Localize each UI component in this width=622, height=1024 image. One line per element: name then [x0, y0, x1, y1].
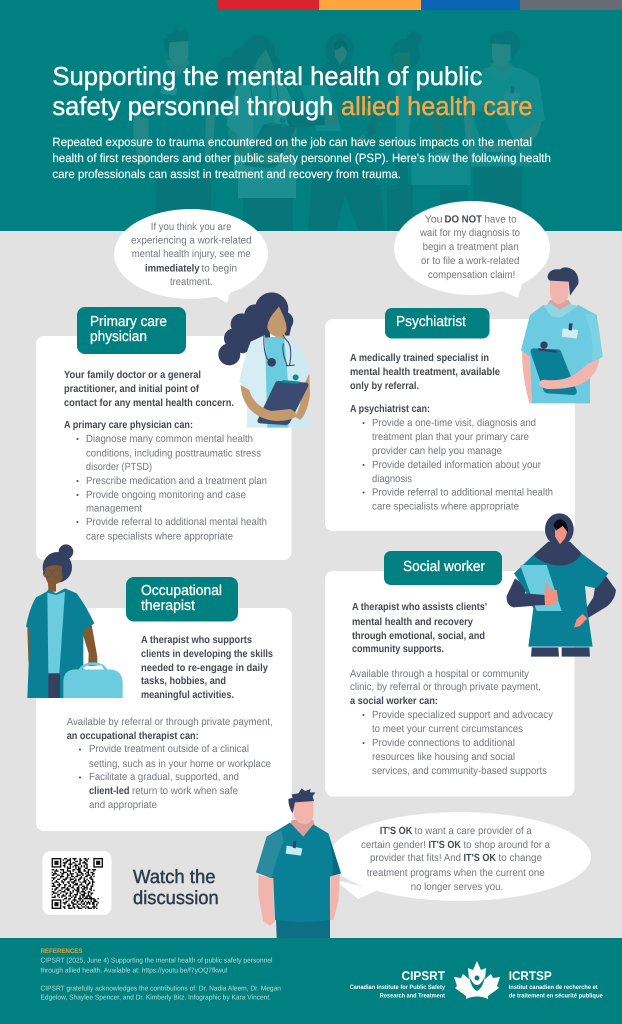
bullet list: Provide connections to additional [372, 738, 515, 749]
bullet list: Diagnose many common mental health [86, 434, 253, 445]
speech bubble: psychiatrist: You [425, 215, 443, 226]
description: tasks, hobbies, and [141, 676, 226, 687]
references: through allied health. Available at: https://youtu.be/f7yOQ7fkwuI [40, 966, 228, 974]
speech bubble: physician: experiencing a work-related [131, 236, 252, 247]
speech bubble: physician: mental health injury, see me [132, 249, 251, 260]
speech bubble: it's ok: certain gender! [361, 840, 426, 851]
icon: occupational therapist figure [26, 544, 123, 698]
references [40, 948, 281, 1002]
card [325, 571, 574, 796]
bullet list: care specialists where appropriate [372, 502, 519, 512]
availability text: Available through a hospital or community [350, 669, 530, 680]
references: CIPSRT (2025, June 4) Supporting the mental health of public safety personnel [40, 956, 273, 964]
heading: psychiatrist: Psychiatrist [396, 314, 466, 330]
panel: primary care physician [36, 307, 292, 560]
heading: social worker [384, 551, 502, 585]
speech bubble: physician [114, 209, 268, 303]
speech bubble: it's ok: no longer serves you. [411, 882, 503, 893]
speech bubble: it's ok: IT'S OK [428, 840, 461, 851]
description: mental health treatment, available [350, 367, 500, 378]
title: safety personnel through [52, 91, 333, 121]
bullet list: client-led [89, 786, 130, 797]
bullet list: return to work when safe [132, 786, 238, 797]
speech bubble: psychiatrist: compensation claim! [428, 270, 515, 281]
bullet list: Prescribe medication and a treatment plan [86, 476, 267, 487]
description: mental health and recovery [352, 617, 473, 628]
panel: psychiatrist [325, 308, 575, 531]
logo: CIPSRT ICRTSP: Research and Treatment [380, 992, 445, 1000]
watch the discussion: Watch the [133, 867, 216, 888]
QR code card [42, 851, 112, 915]
bullet list: disorder (PTSD) [86, 462, 152, 473]
header band [0, 0, 622, 231]
description: A therapist who assists clients' [352, 602, 487, 613]
speech bubble: psychiatrist: DO NOT [444, 215, 483, 226]
logo: CIPSRT ICRTSP: Institut canadien de recherche et [509, 984, 598, 991]
availability text [67, 717, 273, 742]
watch the discussion: discussion [133, 888, 219, 909]
logo: CIPSRT ICRTSP: Canadian Institute for Public Safety [350, 984, 445, 991]
description [64, 370, 234, 431]
references: REFERENCES [40, 948, 83, 955]
logo: CIPSRT ICRTSP: de traitement en sécurité publique [509, 992, 603, 1000]
speech bubble: physician: immediately [145, 264, 200, 275]
speech bubble: it's ok: to shop around for a [464, 840, 550, 851]
bullet list: and appropriate [89, 800, 157, 811]
bullet list: services, and community-based supports [372, 766, 547, 777]
speech bubble: physician: treatment. [170, 277, 212, 288]
bullet list [362, 710, 554, 777]
speech bubble: it's ok: to want a care provider of a [414, 826, 532, 837]
speech bubble: psychiatrist: have to [484, 215, 517, 226]
bullet list: diagnosis [372, 474, 412, 485]
description: meaningful activities. [141, 690, 234, 701]
heading: occupational therapist: Occupational [141, 583, 222, 599]
watch the discussion [133, 867, 219, 909]
panel: social worker [325, 551, 574, 796]
speech bubble: psychiatrist: begin a treatment plan [423, 242, 519, 253]
bullet list: Provide specialized support and advocacy [372, 710, 554, 721]
speech bubble: it's ok: IT'S OK [380, 826, 413, 837]
speech bubble: physician: to begin [202, 264, 237, 275]
bullet list [76, 434, 267, 543]
heading: primary care physician: physician [90, 329, 147, 345]
heading: social worker: Social worker [403, 559, 485, 575]
panel: occupational therapist [36, 577, 292, 831]
bullet list: provider can help you manage [372, 446, 502, 457]
speech bubble: it's ok: to change [498, 853, 542, 864]
bullet list: resources like housing and social [372, 752, 515, 763]
logo: CIPSRT ICRTSP: ICRTSP [509, 969, 552, 983]
availability text: a social worker can: [350, 696, 438, 707]
description: community supports. [352, 644, 444, 655]
heading: occupational therapist [126, 577, 238, 622]
intro text: health of first responders and other public safety personnel (PSP). Here's how the following health [52, 151, 551, 165]
heading: psychiatrist [385, 308, 490, 338]
bullet list [79, 744, 271, 811]
icon: psychiatrist figure [521, 267, 603, 403]
description: A therapist who supports [141, 635, 252, 646]
availability text: Available by referral or through private payment, [67, 717, 273, 728]
logo: CIPSRT ICRTSP [350, 961, 603, 1000]
heading: primary care physician: Primary care [90, 314, 167, 330]
description [141, 635, 273, 701]
title: allied health care [341, 91, 532, 121]
bullet list [362, 418, 553, 512]
speech bubble: psychiatrist: wait for my diagnosis to [419, 228, 520, 239]
speech bubble: it's ok: IT'S OK [464, 853, 496, 864]
description [350, 353, 500, 415]
speech bubble: psychiatrist [394, 201, 550, 298]
bullet list: Provide treatment outside of a clinical [89, 744, 249, 755]
footer band [0, 938, 622, 1024]
references: Edgelow, Shaylee Spencer, and Dr. Kimberly Bitz. Infographic by Kara Vincent. [40, 994, 271, 1002]
bullet list: treatment plan that your primary care [372, 432, 529, 443]
icon: male care provider figure [256, 788, 341, 938]
bullet list: setting, such as in your home or workplace [89, 759, 271, 770]
bullet list: management [86, 504, 142, 515]
description: practitioner, and initial point of [64, 384, 199, 395]
intro text: care professionals can assist in treatment and recovery from trauma. [52, 167, 401, 181]
title [52, 61, 533, 121]
speech bubble: physician: If you think you are [151, 222, 232, 233]
icon: physician figure [218, 292, 310, 428]
description: A psychiatrist can: [350, 404, 430, 415]
card [36, 336, 292, 560]
heading: primary care physician [77, 307, 186, 354]
background silhouettes of care providers [131, 28, 545, 235]
availability text [350, 669, 541, 707]
bullet list: Provide referral to additional mental health [86, 517, 267, 528]
icon: maple leaf [454, 961, 500, 999]
card [36, 608, 292, 831]
intro text [52, 135, 551, 181]
description: A primary care physician can: [64, 420, 193, 431]
bullet list: Provide detailed information about your [372, 460, 541, 471]
speech bubble: it's ok: treatment programs when the current one [367, 868, 545, 879]
colour bar [218, 0, 622, 10]
icon: social worker figure [507, 513, 616, 657]
description: A medically trained specialist in [350, 353, 489, 364]
heading: occupational therapist: therapist [141, 598, 195, 614]
bullet list: care specialists where appropriate [86, 532, 233, 543]
bullet list: Facilitate a gradual, supported, and [89, 772, 239, 783]
bullet list: Provide a one-time visit, diagnosis and [372, 418, 536, 429]
description: through emotional, social, and [352, 631, 485, 642]
description: needed to re-engage in daily [141, 663, 268, 674]
speech bubble: it's ok: provider that fits! And [370, 853, 461, 864]
availability text: an occupational therapist can: [67, 731, 199, 742]
card [325, 319, 575, 531]
description: Your family doctor or a general [64, 370, 201, 381]
logo: CIPSRT ICRTSP: CIPSRT [402, 969, 445, 983]
bullet list: Provide referral to additional mental health [372, 488, 553, 498]
intro text: Repeated exposure to trauma encountered on the job can have serious impacts on the mental [52, 135, 532, 149]
availability text: clinic, by referral or through private payment, [350, 682, 541, 693]
description: only by referral. [350, 381, 419, 392]
description [352, 602, 487, 655]
description: contact for any mental health concern. [64, 398, 234, 409]
bullet list: conditions, including posttraumatic stress [86, 449, 261, 460]
title: Supporting the mental health of public [52, 61, 482, 91]
speech bubble: it's ok [329, 812, 591, 901]
speech bubble: psychiatrist: or to file a work-related [421, 256, 520, 267]
references: CIPSRT gratefully acknowledges the contributions of: Dr. Nadia Aleem, Dr. Megan [40, 984, 281, 992]
bullet list: to meet your current circumstances [372, 724, 523, 735]
bullet list: Provide ongoing monitoring and case [86, 490, 246, 501]
description: clients in developing the skills [141, 649, 273, 660]
